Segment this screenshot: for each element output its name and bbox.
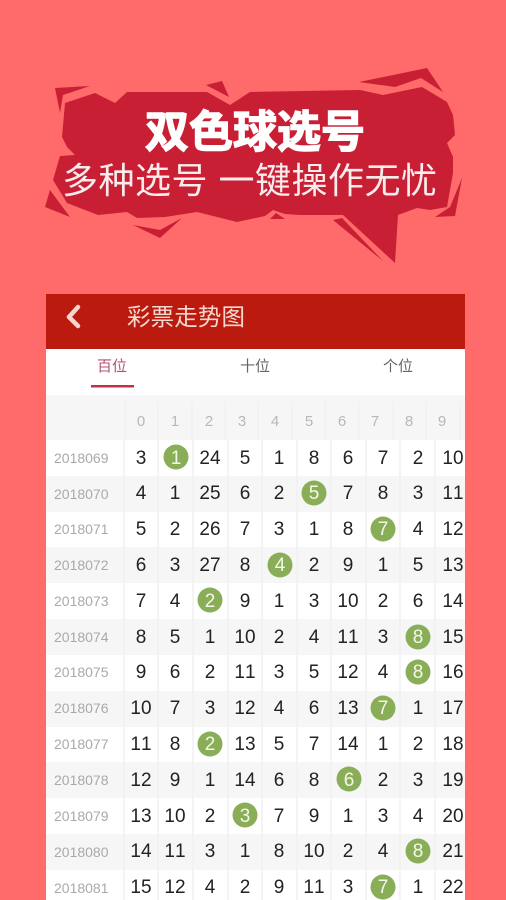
row 2018077: 14 — [337, 734, 359, 755]
row 2018079: 13 — [130, 806, 152, 827]
row 2018080: 21 — [442, 841, 464, 862]
tabs — [91, 358, 413, 388]
row 2018075: 4 — [378, 662, 389, 683]
row 2018075: 16 — [442, 662, 464, 683]
row 2018069: 6 — [343, 448, 353, 469]
row 2018078: 6 — [344, 770, 354, 791]
row 2018081 — [54, 874, 464, 900]
row 2018075: 8 — [413, 662, 423, 683]
row 2018073 — [54, 588, 464, 612]
row 2018070: 1 — [170, 483, 180, 504]
row 2018081: 3 — [343, 877, 353, 898]
row 2018072: 13 — [442, 555, 464, 576]
row 2018073: 2 — [378, 591, 388, 612]
row 2018079: 2 — [205, 806, 215, 827]
row 2018070: 3 — [413, 483, 423, 504]
row 2018080: 2018080 — [54, 844, 109, 860]
row 2018074: 8 — [136, 627, 146, 648]
row 2018079: 7 — [274, 806, 284, 827]
row 2018069: 2 — [413, 448, 423, 469]
row 2018080 — [54, 838, 464, 864]
row 2018073: 2018073 — [54, 593, 109, 609]
row 2018071: 2 — [170, 519, 180, 540]
row 2018079: 4 — [413, 806, 424, 827]
row 2018072: 1 — [378, 555, 388, 576]
row 2018077: 2 — [205, 734, 215, 755]
row 2018078: 1 — [205, 770, 215, 791]
row 2018074: 5 — [170, 627, 180, 648]
row 2018070: 5 — [309, 483, 319, 504]
row 2018076: 4 — [274, 698, 285, 719]
header title: 彩票走势图 — [127, 304, 245, 330]
row 2018071 — [54, 516, 464, 542]
tab: ones: 个位 — [383, 358, 413, 375]
row 2018074: 10 — [234, 627, 256, 648]
row 2018069: 10 — [442, 448, 464, 469]
row 2018075: 5 — [309, 662, 319, 683]
row 2018070: 2018070 — [54, 486, 109, 502]
row 2018072: 3 — [170, 555, 180, 576]
row 2018071: 2018071 — [54, 521, 109, 537]
row 2018070: 6 — [240, 483, 250, 504]
row 2018071: 8 — [343, 519, 353, 540]
row 2018074: 8 — [413, 627, 423, 648]
row 2018072: 27 — [199, 555, 221, 576]
row 2018077: 2018077 — [54, 736, 109, 752]
row 2018069: 2018069 — [54, 450, 109, 466]
row 2018078: 3 — [413, 770, 423, 791]
row 2018077: 1 — [378, 734, 388, 755]
row 2018079: 3 — [240, 806, 250, 827]
column header digits — [137, 413, 446, 430]
row 2018069: 8 — [309, 448, 319, 469]
row 2018080: 1 — [240, 841, 250, 862]
row 2018069: 5 — [240, 448, 250, 469]
row 2018071: 1 — [309, 519, 319, 540]
row 2018073: 10 — [337, 591, 359, 612]
row 2018079 — [54, 802, 464, 828]
column header digits: 3 — [238, 413, 246, 430]
row 2018073: 9 — [240, 591, 250, 612]
row 2018081: 2018081 — [54, 880, 109, 896]
row 2018081: 1 — [413, 877, 423, 898]
row 2018078: 6 — [274, 770, 284, 791]
row 2018069: 7 — [378, 448, 388, 469]
row 2018077: 11 — [130, 734, 152, 755]
row 2018072: 6 — [136, 555, 146, 576]
row 2018078: 14 — [234, 770, 256, 791]
row 2018069: 1 — [171, 448, 181, 469]
row 2018069 — [54, 444, 464, 470]
row 2018081: 9 — [274, 877, 284, 898]
row 2018080: 11 — [164, 841, 186, 862]
row 2018073: 3 — [309, 591, 319, 612]
row 2018074: 4 — [309, 627, 320, 648]
row 2018081: 12 — [164, 877, 186, 898]
row 2018075: 11 — [234, 662, 256, 683]
row 2018076 — [54, 696, 464, 720]
row 2018070: 2 — [274, 483, 284, 504]
row 2018081: 4 — [205, 877, 216, 898]
panel background — [46, 349, 465, 900]
row 2018080: 4 — [378, 841, 389, 862]
row 2018076: 17 — [442, 698, 464, 719]
row 2018076: 7 — [170, 698, 180, 719]
row 2018072: 5 — [413, 555, 423, 576]
row 2018078: 2018078 — [54, 772, 109, 788]
subtitle: 多种选号 一键操作无忧 — [62, 160, 437, 201]
row 2018080: 14 — [130, 841, 152, 862]
row 2018073: 2 — [205, 591, 215, 612]
column header digits: 9 — [438, 413, 446, 430]
row 2018074: 2 — [274, 627, 284, 648]
row 2018081: 22 — [442, 877, 464, 898]
row 2018072: 2 — [309, 555, 319, 576]
row 2018078: 12 — [130, 770, 152, 791]
row 2018070: 25 — [199, 483, 221, 504]
table stripes — [46, 395, 465, 870]
app screen — [46, 294, 465, 900]
row 2018077: 13 — [234, 734, 256, 755]
row 2018076: 1 — [413, 698, 423, 719]
row 2018080: 10 — [303, 841, 325, 862]
row 2018070: 8 — [378, 483, 388, 504]
row 2018079: 9 — [309, 806, 319, 827]
row 2018072: 8 — [240, 555, 250, 576]
column header digits: 7 — [371, 413, 379, 430]
row 2018071: 7 — [240, 519, 250, 540]
banner — [45, 68, 462, 263]
row 2018080: 2 — [343, 841, 353, 862]
row 2018081: 2 — [240, 877, 250, 898]
row 2018077 — [54, 732, 464, 756]
icon: back arrow — [69, 307, 78, 326]
row 2018075: 2 — [205, 662, 215, 683]
row 2018079: 10 — [164, 806, 186, 827]
row 2018071: 5 — [136, 519, 146, 540]
row 2018073: 1 — [274, 591, 284, 612]
row 2018078: 8 — [309, 770, 319, 791]
row 2018070: 11 — [442, 483, 464, 504]
row 2018076: 7 — [378, 698, 388, 719]
row 2018075: 9 — [136, 662, 146, 683]
column header digits: 4 — [271, 413, 279, 430]
row 2018069: 1 — [274, 448, 284, 469]
row 2018079: 1 — [343, 806, 353, 827]
row 2018076: 3 — [205, 698, 215, 719]
row 2018078: 2 — [378, 770, 388, 791]
row 2018077: 2 — [413, 734, 423, 755]
row 2018076: 6 — [309, 698, 319, 719]
row 2018071: 26 — [199, 519, 221, 540]
column header digits: 5 — [305, 413, 313, 430]
row 2018078: 9 — [170, 770, 180, 791]
row 2018073: 7 — [136, 591, 146, 612]
row 2018071: 4 — [413, 519, 424, 540]
column header digits: 0 — [137, 413, 145, 430]
row 2018077: 5 — [274, 734, 284, 755]
tab: tens: 十位 — [240, 358, 270, 375]
row 2018076: 12 — [234, 698, 256, 719]
row 2018071: 12 — [442, 519, 464, 540]
row 2018075: 12 — [337, 662, 359, 683]
speech bubble — [45, 68, 462, 263]
row 2018070: 7 — [343, 483, 353, 504]
tab underline — [91, 385, 134, 388]
row 2018074: 1 — [205, 627, 215, 648]
column header digits: 2 — [205, 413, 213, 430]
row 2018076: 2018076 — [54, 700, 109, 716]
header bar — [46, 294, 465, 349]
row 2018078: 19 — [442, 770, 464, 791]
row 2018080: 3 — [205, 841, 215, 862]
row 2018074: 15 — [442, 627, 464, 648]
row 2018075: 6 — [170, 662, 180, 683]
row 2018077: 7 — [309, 734, 319, 755]
row 2018080: 8 — [274, 841, 284, 862]
row 2018075 — [54, 660, 464, 684]
row 2018069: 3 — [136, 448, 146, 469]
row 2018069: 24 — [199, 448, 221, 469]
row 2018079: 20 — [442, 806, 464, 827]
tab: hundreds: 百位 — [97, 358, 127, 375]
row 2018075: 2018075 — [54, 664, 109, 680]
row 2018070: 4 — [136, 483, 147, 504]
row 2018070 — [54, 480, 464, 506]
row 2018077: 18 — [442, 734, 464, 755]
trend table — [46, 395, 465, 900]
row 2018077: 8 — [170, 734, 180, 755]
row 2018071: 7 — [378, 519, 388, 540]
row 2018073: 4 — [170, 591, 181, 612]
row 2018074: 3 — [378, 627, 388, 648]
row 2018072: 2018072 — [54, 557, 109, 573]
row 2018074 — [54, 624, 464, 650]
row 2018075: 3 — [274, 662, 284, 683]
row 2018074: 2018074 — [54, 629, 109, 645]
row 2018071: 3 — [274, 519, 284, 540]
column header digits: 1 — [171, 413, 179, 430]
row 2018081: 15 — [130, 877, 152, 898]
row 2018073: 14 — [442, 591, 464, 612]
row 2018080: 8 — [413, 841, 423, 862]
column header digits: 8 — [405, 413, 413, 430]
row 2018074: 11 — [337, 627, 359, 648]
title: 双色球选号 — [145, 108, 365, 157]
row 2018076: 10 — [130, 698, 152, 719]
row 2018073: 6 — [413, 591, 423, 612]
row 2018072 — [54, 552, 464, 578]
row 2018076: 13 — [337, 698, 359, 719]
row 2018081: 11 — [303, 877, 325, 898]
row 2018079: 3 — [378, 806, 388, 827]
row 2018078 — [54, 766, 464, 792]
row 2018072: 4 — [275, 555, 286, 576]
row 2018079: 2018079 — [54, 808, 109, 824]
row 2018072: 9 — [343, 555, 353, 576]
column header digits: 6 — [338, 413, 346, 430]
row 2018081: 7 — [378, 877, 388, 898]
